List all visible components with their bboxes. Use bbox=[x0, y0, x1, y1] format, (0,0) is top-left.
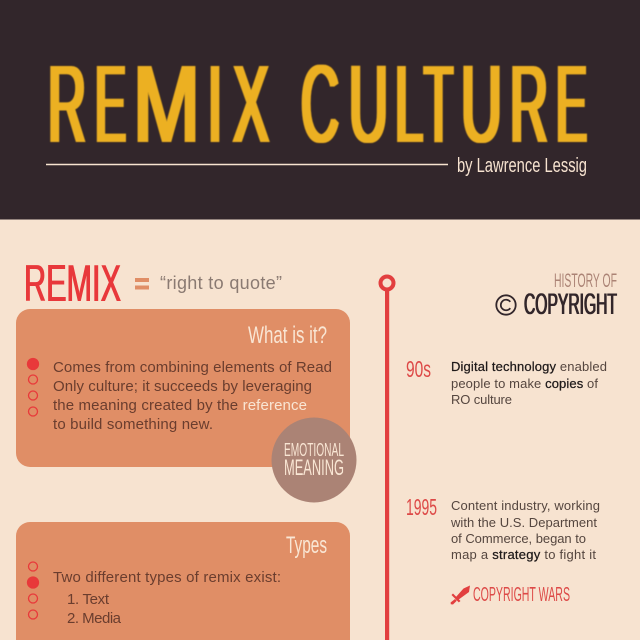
copyright wars label bbox=[451, 584, 570, 606]
progress dots bbox=[28, 562, 38, 619]
title: U bbox=[349, 43, 388, 166]
types list: 1. Text bbox=[67, 591, 110, 608]
timeline entry: 1995: 1995 bbox=[406, 494, 437, 520]
title: I bbox=[208, 43, 222, 166]
equals sign bbox=[135, 278, 149, 290]
icon: copyright bbox=[496, 295, 516, 315]
title: C bbox=[301, 43, 339, 166]
timeline entry: 90s: RO culture bbox=[451, 392, 512, 407]
title: M bbox=[133, 43, 200, 166]
timeline entry: 90s: people to make copies of bbox=[451, 376, 598, 391]
timeline entry: 90s: Digital technology enabled bbox=[451, 359, 607, 374]
timeline entry: 90s bbox=[406, 356, 607, 407]
description text: the meaning created by the reference bbox=[53, 397, 307, 414]
remix heading: REMIX bbox=[24, 255, 121, 313]
header band: E bbox=[556, 43, 587, 166]
panel: types bbox=[16, 522, 350, 640]
timeline entry: 1995: with the U.S. Department bbox=[450, 515, 597, 530]
panel: what is it bbox=[16, 309, 350, 467]
remix heading: “right to quote” bbox=[160, 273, 282, 293]
timeline entry: 1995 bbox=[406, 494, 600, 562]
timeline entry: 90s: 90s bbox=[406, 356, 431, 382]
title: R bbox=[48, 43, 86, 166]
types list: Two different types of remix exist: bbox=[53, 569, 281, 586]
timeline entry: 1995: Content industry, working bbox=[451, 498, 600, 513]
header band bbox=[0, 0, 640, 220]
title: E bbox=[95, 43, 126, 166]
timeline bbox=[380, 276, 394, 640]
remix heading bbox=[24, 255, 282, 313]
title: R bbox=[510, 43, 548, 166]
byline: by Lawrence Lessig bbox=[457, 155, 587, 177]
description text: Only culture; it succeeds by leveraging bbox=[53, 378, 312, 395]
badge: emotional meaning: MEANING bbox=[284, 455, 344, 480]
title: L bbox=[395, 43, 423, 166]
panel heading: Types bbox=[286, 532, 327, 559]
types list bbox=[53, 569, 281, 627]
badge: emotional meaning: EMOTIONAL bbox=[284, 440, 344, 460]
description text: Comes from combining elements of Read bbox=[53, 359, 332, 376]
title: X bbox=[233, 43, 269, 166]
title: T bbox=[424, 43, 453, 166]
progress dots bbox=[28, 358, 38, 416]
badge: emotional meaning bbox=[272, 418, 356, 502]
description text bbox=[53, 359, 332, 433]
timeline entry: 1995: of Commerce, began to bbox=[451, 531, 586, 546]
history of copyright heading bbox=[496, 271, 617, 321]
icon: sword bbox=[451, 586, 470, 604]
panel heading: What is it? bbox=[248, 322, 327, 349]
types list: 2. Media bbox=[67, 610, 122, 627]
title: U bbox=[461, 43, 502, 166]
timeline entry: 1995: map a strategy to fight it bbox=[451, 547, 596, 562]
description text: to build something new. bbox=[53, 416, 213, 433]
